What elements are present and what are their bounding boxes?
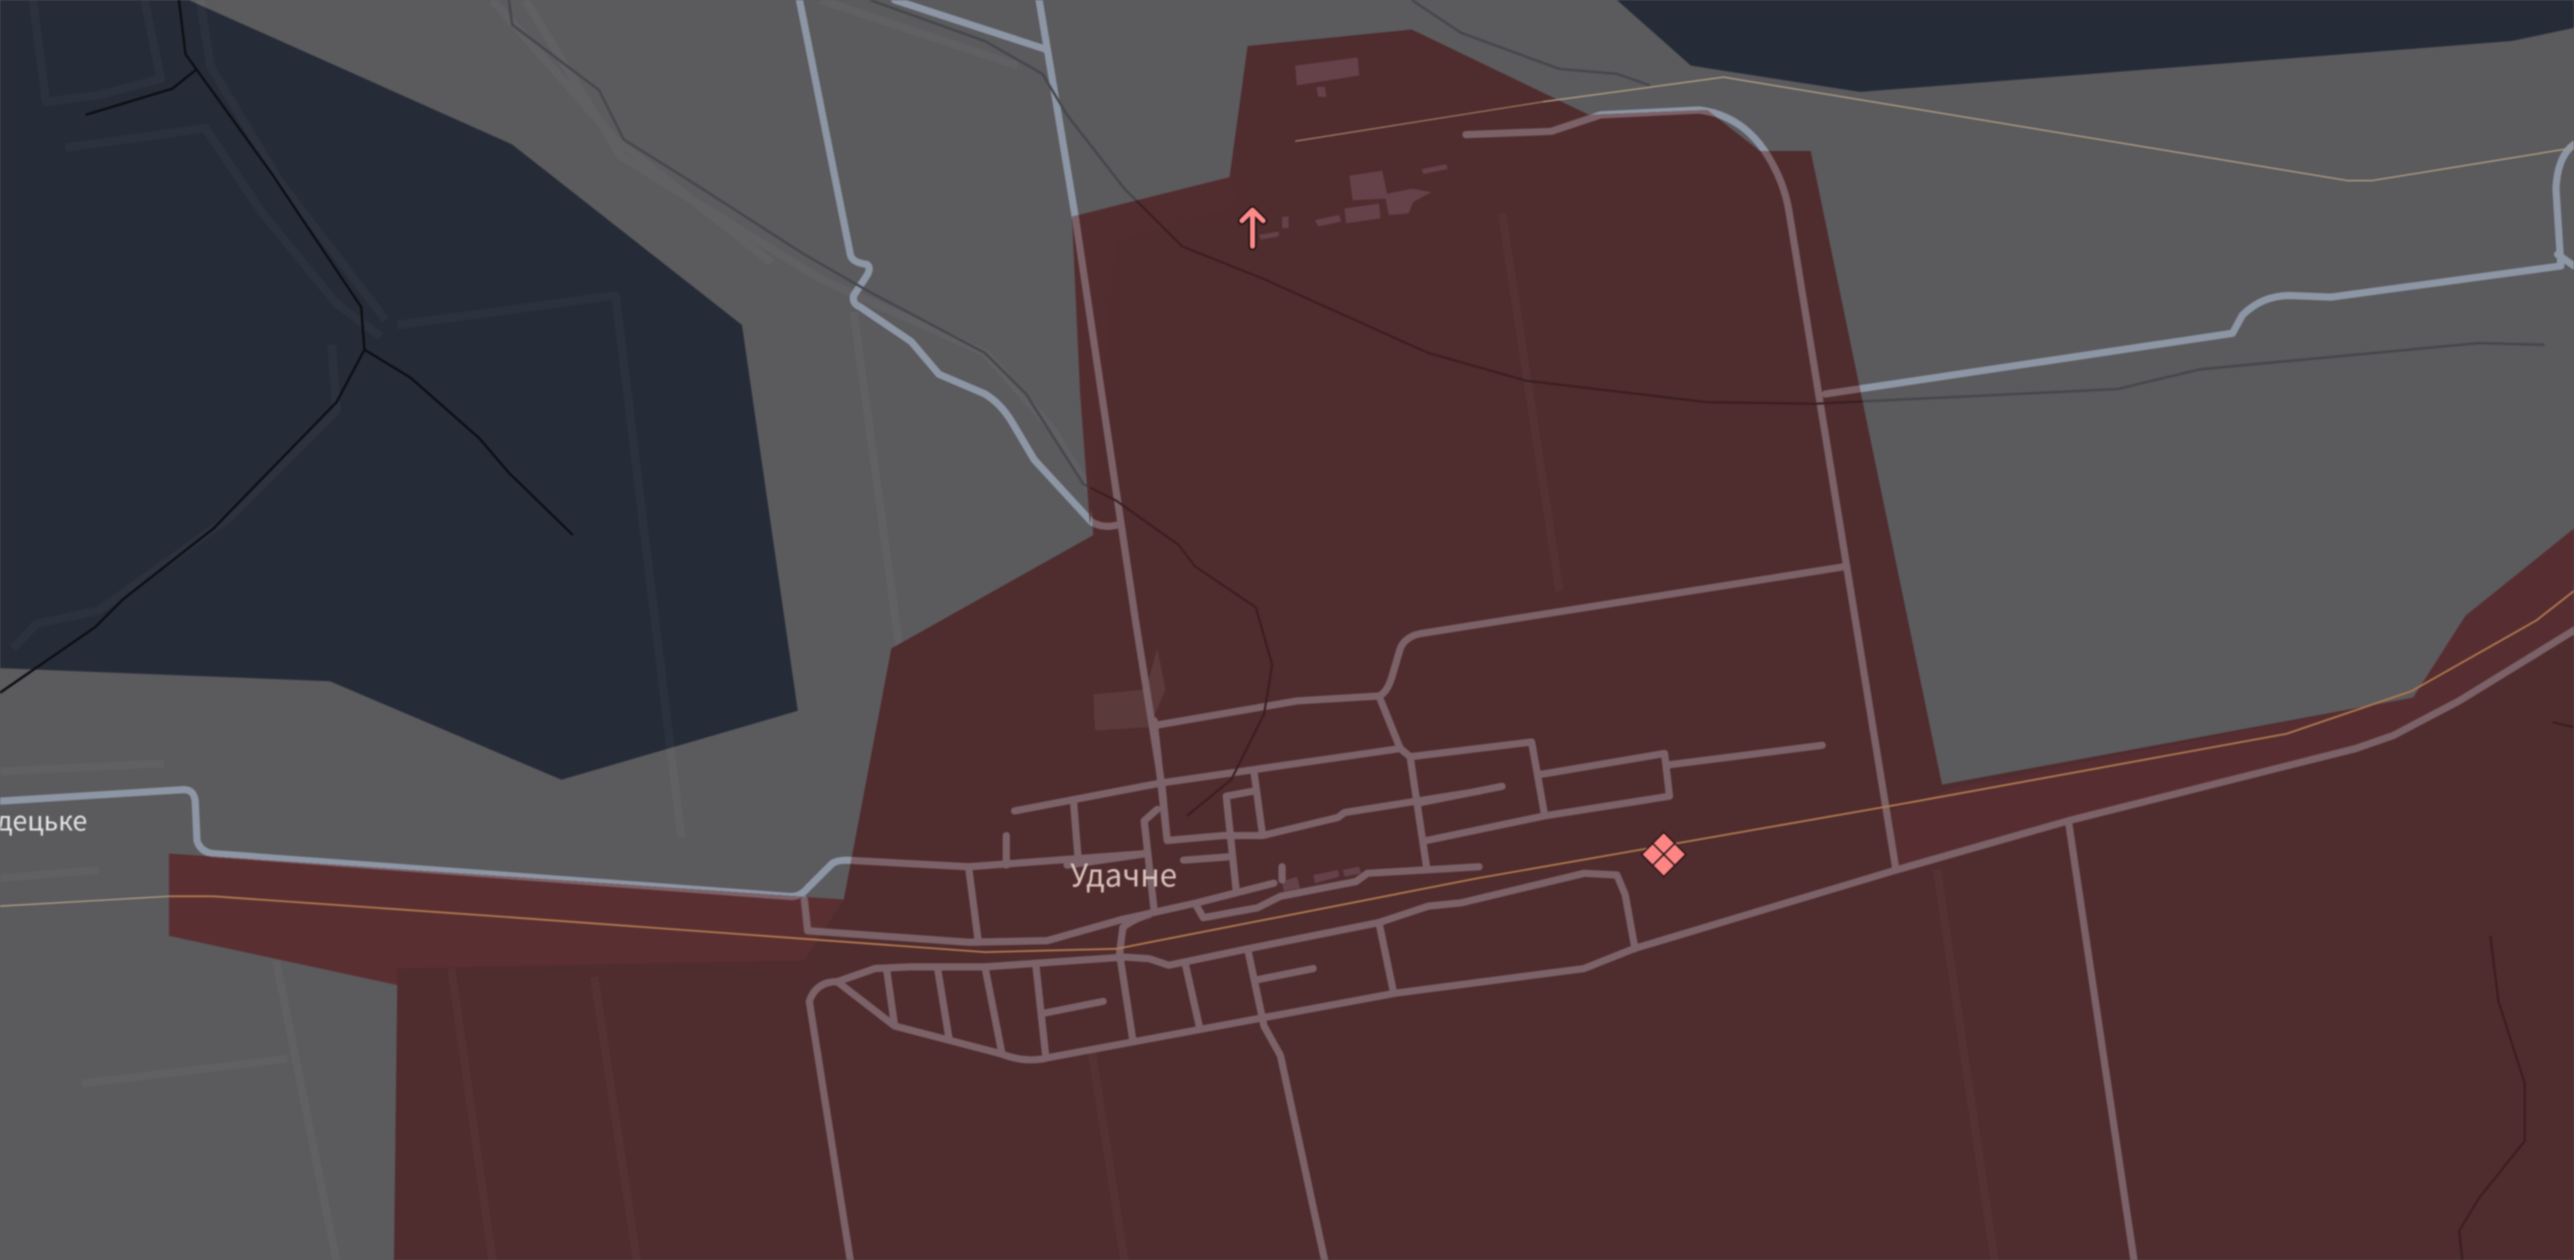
zone: dark upper-right — [1617, 0, 2574, 92]
label: Удачне: Удачне — [1070, 850, 1177, 895]
icon: diamond marker — [1642, 832, 1686, 877]
rail line — [169, 102, 2574, 952]
power line on grey — [0, 77, 2574, 906]
buildings — [1093, 57, 1448, 891]
faint minor tracks — [0, 0, 1995, 1260]
faint tracks in red zone — [451, 213, 1995, 1260]
icon: arrow — [1242, 210, 1263, 246]
rivers on dark zone — [0, 0, 573, 693]
lighter red band along the rail line — [169, 177, 2574, 985]
zone: dark upper-left — [0, 0, 798, 780]
rivers in red zone — [1090, 200, 2574, 1260]
